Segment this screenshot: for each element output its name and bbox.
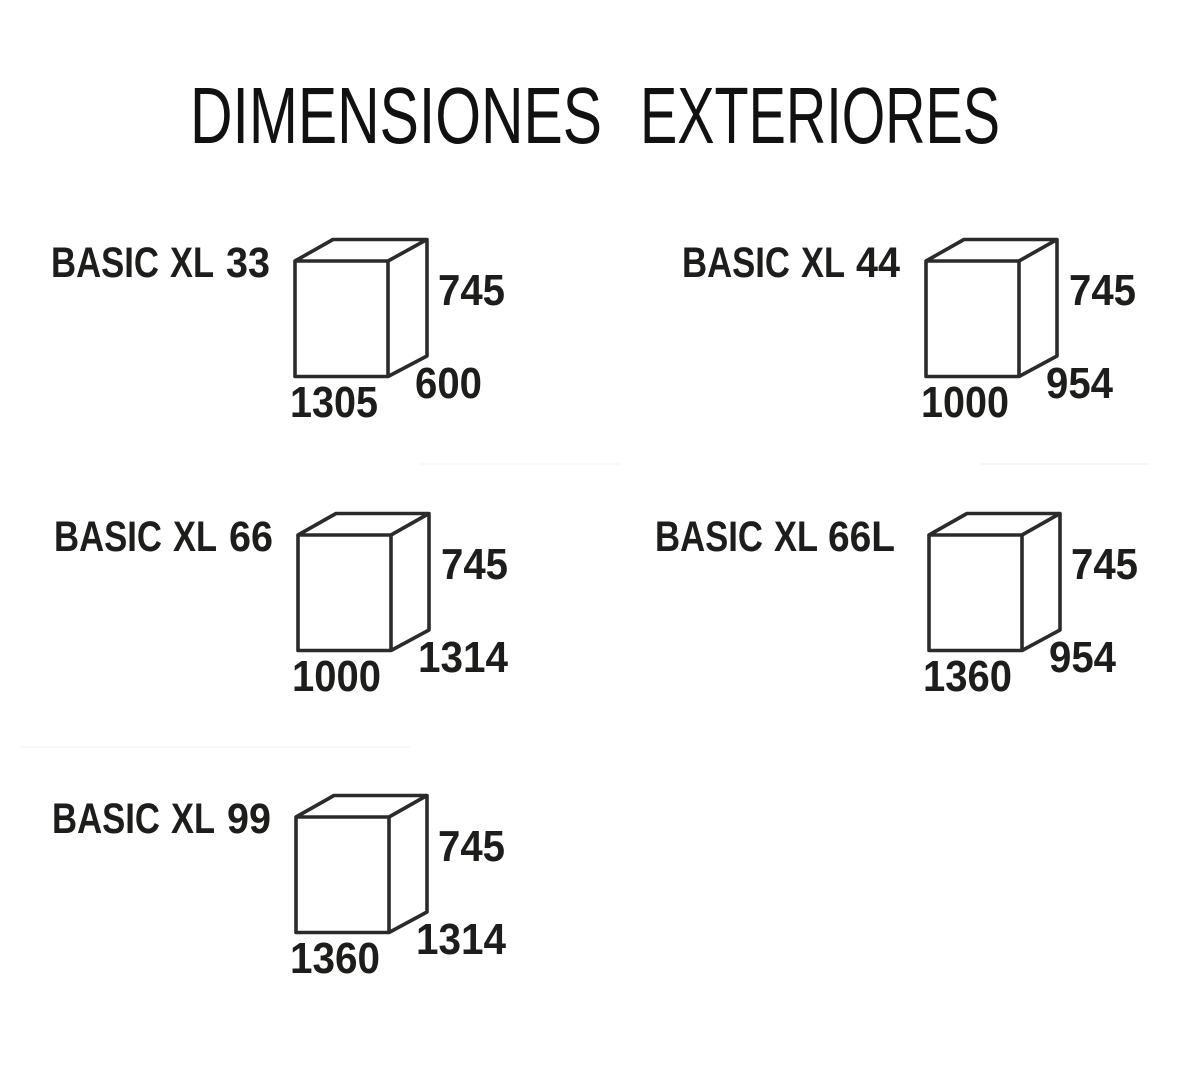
panel: BASIC XL 66L: XL	[774, 513, 818, 561]
panel: BASIC XL 33: XL	[170, 239, 214, 287]
panel: BASIC XL 66: 66	[229, 513, 273, 561]
panel: BASIC XL 66L: 745	[1071, 540, 1138, 589]
panel: BASIC XL 44: 44	[856, 239, 900, 287]
panel: BASIC XL 66	[54, 513, 508, 701]
title	[190, 71, 1000, 160]
panel: BASIC XL 99: 1360	[290, 934, 380, 983]
panel: BASIC XL 66: 1314	[418, 633, 508, 682]
panel: BASIC XL 99	[52, 795, 506, 983]
panel: BASIC XL 44: BASIC	[682, 239, 790, 287]
panel: BASIC XL 33: BASIC	[51, 239, 159, 287]
panel: BASIC XL 66L: BASIC	[655, 513, 763, 561]
panel: BASIC XL 33: 745	[438, 266, 505, 315]
panel: BASIC XL 66: XL	[173, 513, 217, 561]
title: DIMENSIONES	[190, 71, 602, 160]
panel: BASIC XL 99: XL	[171, 795, 215, 843]
panel: BASIC XL 66L: 1360	[923, 652, 1012, 701]
panel: BASIC XL 33: 33	[226, 239, 270, 287]
panel: BASIC XL 66L: 66L	[828, 513, 895, 561]
panel: BASIC XL 33: 600	[415, 359, 482, 408]
panel: BASIC XL 44: 1000	[921, 378, 1009, 427]
panel: BASIC XL 44	[682, 239, 1136, 427]
panel: BASIC XL 66: 745	[441, 540, 508, 589]
panel: BASIC XL 66L	[655, 513, 1138, 701]
panel: BASIC XL 66: BASIC	[54, 513, 162, 561]
panel: BASIC XL 99: BASIC	[52, 795, 160, 843]
panel: BASIC XL 99: 1314	[416, 915, 506, 964]
panel: BASIC XL 44: 954	[1046, 359, 1113, 408]
panel: BASIC XL 66: 1000	[292, 652, 381, 701]
panel: BASIC XL 66L: 954	[1049, 633, 1116, 682]
panel: BASIC XL 33	[51, 239, 505, 427]
title: EXTERIORES	[640, 71, 1000, 160]
panel: BASIC XL 33: 1305	[290, 378, 378, 427]
panel: BASIC XL 44: 745	[1069, 266, 1136, 315]
panel: BASIC XL 44: XL	[801, 239, 845, 287]
panel: BASIC XL 99: 745	[438, 822, 505, 871]
panel: BASIC XL 99: 99	[227, 795, 271, 843]
